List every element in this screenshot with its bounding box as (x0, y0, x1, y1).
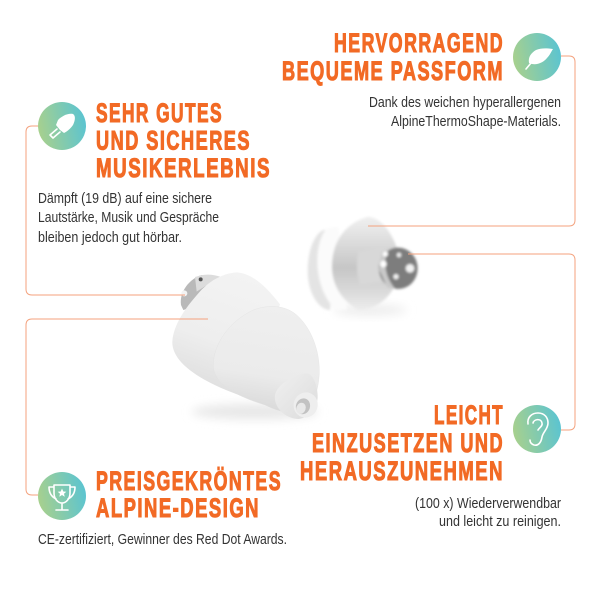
heading: UND SICHERES (96, 126, 251, 156)
text block: bleiben jedoch gut hörbar. (38, 229, 182, 246)
connector lines (26, 56, 575, 495)
heading: EINZUSETZEN UND (312, 428, 504, 458)
panel: award-winning design (38, 466, 287, 548)
heading: PREISGEKRÖNTES (96, 466, 282, 496)
text block: AlpineThermoShape-Materials. (391, 113, 561, 130)
line: bottom left icon to front earplug (26, 319, 208, 495)
text block: CE-zertifiziert, Gewinner des Red Dot Awards. (38, 531, 287, 548)
line: bottom right icon to rear earplug (408, 254, 575, 430)
icon: feather on gradient circle (513, 33, 561, 81)
panel: comfortable fit (282, 28, 561, 130)
heading: LEICHT (434, 400, 504, 430)
heading: HERAUSZUNEHMEN (300, 456, 504, 486)
text block: Lautstärke, Musik und Gespräche (38, 209, 219, 226)
tip of the earplug (275, 373, 321, 421)
text block: (100 x) Wiederverwendbar (415, 495, 561, 512)
panel: sound safety (38, 98, 271, 246)
text block: Dämpft (19 dB) auf eine sichere (38, 190, 212, 207)
heading: ALPINE-DESIGN (96, 493, 260, 523)
heading: HERVORRAGEND (334, 28, 504, 58)
heading: MUSIKERLEBNIS (96, 153, 271, 183)
icon: ear on gradient circle (513, 405, 561, 453)
text block: und leicht zu reinigen. (439, 513, 561, 530)
heading: SEHR GUTES (96, 98, 223, 128)
product: front earplug (172, 272, 321, 421)
panel: easy insertion (300, 400, 561, 530)
line: top right icon to rear earplug (368, 56, 575, 226)
line: top left icon to front earplug (26, 126, 185, 295)
icon: trophy on gradient circle (38, 472, 86, 520)
product: blurred rear earplug (308, 217, 418, 315)
text block: Dank des weichen hyperallergenen (369, 94, 561, 111)
icon: earplug on gradient circle (38, 102, 86, 150)
